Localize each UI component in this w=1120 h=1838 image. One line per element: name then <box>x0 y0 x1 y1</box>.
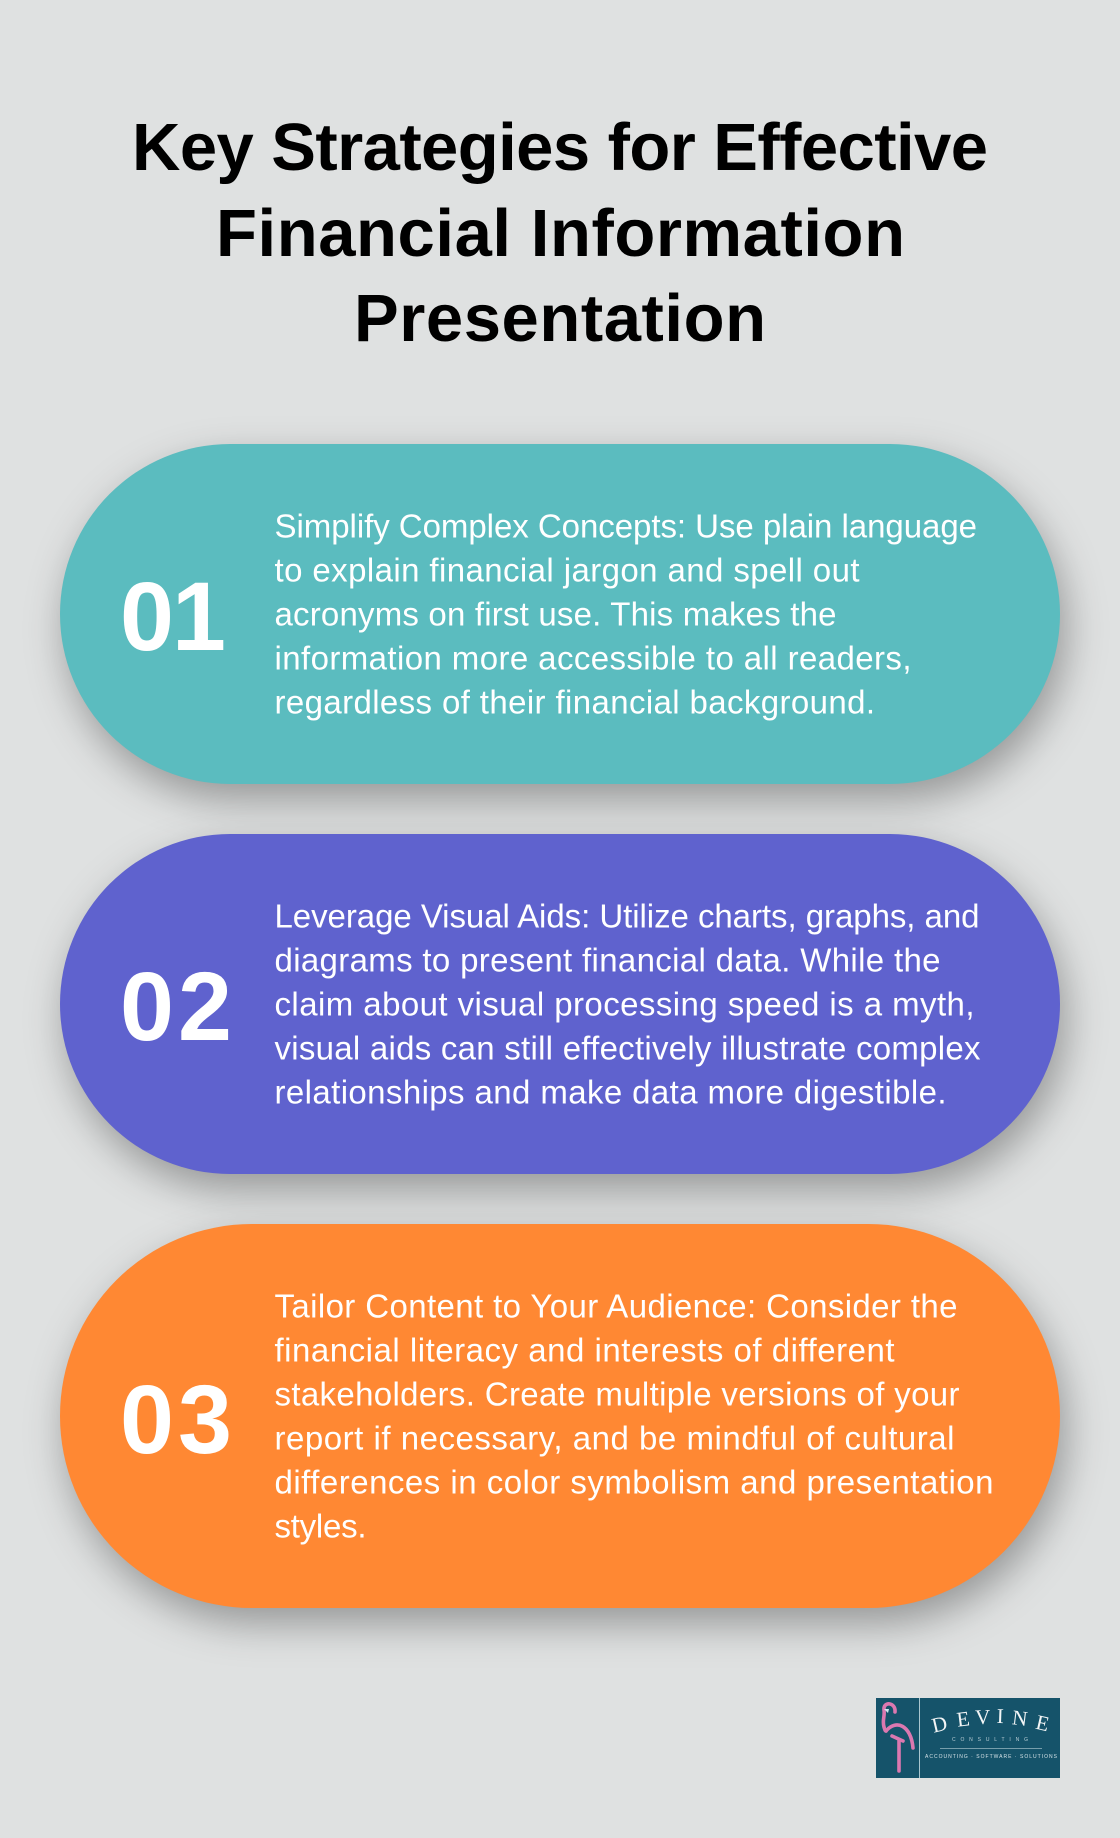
title: Key Strategies for Effective <box>132 110 988 185</box>
text: simplify complex concepts: to explain financial jargon and spell out <box>274 552 860 588</box>
text: tailor content <box>274 1288 994 1544</box>
text: tailor content: financial literacy and interests of different <box>274 1332 894 1368</box>
logo: Devine Consulting: CONSULTING <box>952 1737 1028 1743</box>
text: simplify complex concepts: Simplify Complex Concepts: Use plain language <box>274 508 977 544</box>
text: tailor content: styles. <box>274 1508 366 1544</box>
text: simplify complex concepts: information more accessible to all readers, <box>274 640 912 676</box>
logo wordmark: N <box>1011 1705 1029 1731</box>
text: leverage visual aids: relationships and make data more digestible. <box>274 1074 946 1110</box>
text: leverage visual aids: claim about visual processing speed is a myth, <box>274 986 974 1022</box>
title: Financial Information <box>216 196 905 271</box>
text: simplify complex concepts: regardless of their financial background. <box>274 684 875 720</box>
text: leverage visual aids: visual aids can still effectively illustrate complex <box>274 1030 981 1066</box>
text: tailor content: stakeholders. Create multiple versions of your <box>274 1376 960 1412</box>
panel: step 03 <box>60 1224 1066 1624</box>
panel: step 02 <box>60 834 1066 1190</box>
logo wordmark: D <box>929 1711 950 1738</box>
number 03: 03 <box>120 1365 232 1474</box>
text: tailor content: Tailor Content to Your Audience: Consider the <box>274 1288 958 1324</box>
icon: flamingo <box>883 1704 913 1771</box>
panel: step 01 <box>60 444 1066 800</box>
text: simplify complex concepts <box>274 508 977 720</box>
logo wordmark: I <box>996 1704 1004 1728</box>
logo: Devine Consulting <box>876 1698 1060 1778</box>
text: leverage visual aids <box>274 898 981 1110</box>
number 02: 02 <box>120 952 232 1061</box>
text: leverage visual aids: diagrams to present financial data. While the <box>274 942 940 978</box>
number 01: 01 <box>120 562 226 671</box>
text: tailor content: report if necessary, and be mindful of cultural <box>274 1420 954 1456</box>
logo wordmark <box>929 1704 1052 1738</box>
logo wordmark: V <box>975 1705 991 1729</box>
logo wordmark: E <box>955 1706 971 1732</box>
title: Presentation <box>354 281 766 356</box>
text: simplify complex concepts: acronyms on first use. This makes the <box>274 596 836 632</box>
text: tailor content: differences in color symbolism and presentation <box>274 1464 994 1500</box>
title <box>132 110 988 356</box>
logo wordmark: E <box>1034 1710 1052 1736</box>
logo: Devine Consulting: ACCOUNTING · SOFTWARE · SOLUTIONS <box>925 1754 1058 1760</box>
text: leverage visual aids: Leverage Visual Aids: Utilize charts, graphs, and <box>274 898 980 934</box>
